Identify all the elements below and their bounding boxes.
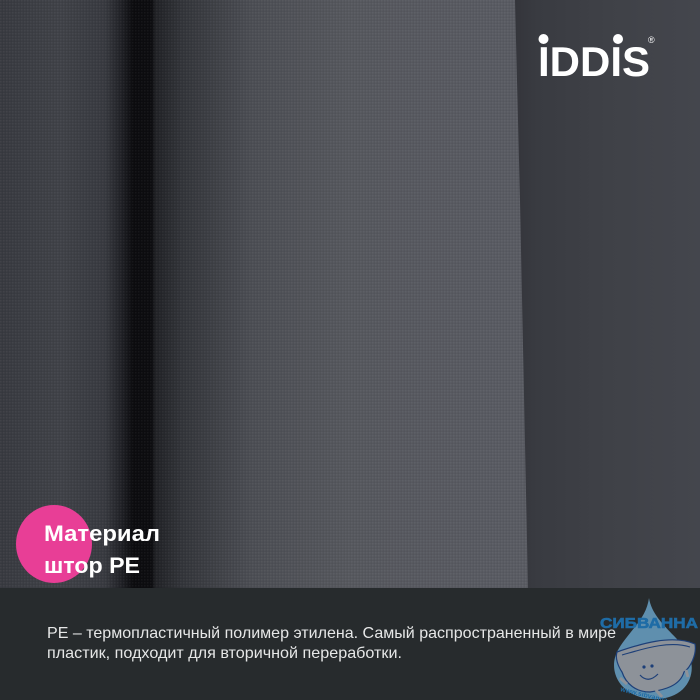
logo: IDDIS: IDDIS [538,38,650,85]
watermark: Сибванна bath in a drop [600,598,698,700]
panel: description band [0,588,700,700]
watermark: Сибванна bath in a drop: СИБВАННА [600,615,698,632]
text block: PE description: PE – термопластичный полимер этилена. Самый распространенный в мире [47,625,616,642]
pink circle accent [16,505,92,583]
heading: Материал штор PE [44,521,160,578]
heading: Материал штор PE: Материал [44,521,160,546]
text block: PE description: пластик, подходит для вторичной переработки. [47,645,402,662]
logo: IDDIS: ® [648,35,655,45]
text block: PE description [47,625,616,662]
heading: Материал штор PE: штор PE [44,553,140,578]
